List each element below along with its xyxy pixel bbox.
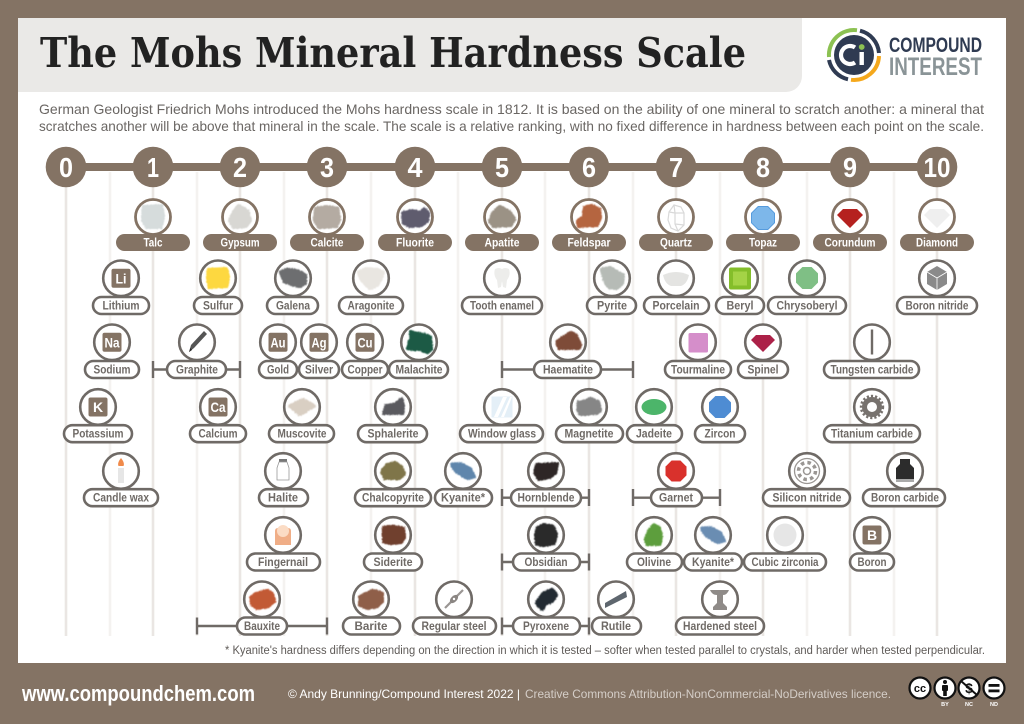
mineral: Pyroxene: Pyroxene [523, 621, 569, 633]
mineral: Tungsten carbide: Tungsten carbide [830, 364, 914, 376]
mineral: Diamond [900, 200, 974, 251]
mineral: Candle wax [84, 453, 158, 506]
mineral: Lithium: Li [116, 270, 126, 286]
mineral: Corundum [813, 200, 887, 251]
mineral: Gold: Gold [267, 364, 289, 376]
mineral: Pyrite: Pyrite [597, 300, 627, 312]
mineral: Titanium carbide [824, 389, 920, 442]
mineral: Titanium carbide: Titanium carbide [831, 429, 913, 441]
mineral: Graphite [153, 324, 240, 378]
mineral: Tourmaline [665, 324, 731, 378]
mineral: Sodium: Na [104, 334, 120, 350]
whole-step guide lines [66, 172, 937, 636]
mineral: Siderite: Siderite [374, 557, 412, 569]
mineral: Galena: Galena [276, 300, 311, 312]
scale axis 0 to 10: 6 [582, 152, 596, 183]
mineral: Boron: Boron [858, 557, 886, 569]
licence icons: BY [941, 702, 949, 708]
scale axis 0 to 10: 5 [495, 152, 509, 183]
mineral: Lithium [93, 260, 149, 314]
mineral: Silicon nitride: Silicon nitride [772, 493, 842, 505]
footer credit: © Andy Brunning/Compound Interest 2022 | [288, 687, 520, 701]
half-step guide lines [110, 172, 894, 636]
mineral: Potassium: K [93, 399, 103, 415]
mineral: Topaz [726, 200, 800, 251]
mineral: Boron [850, 517, 894, 570]
mineral: Jadeite: Jadeite [636, 429, 672, 441]
mineral: Kyanite (softer orientation) [435, 453, 492, 506]
mineral: Copper: Cu [358, 334, 372, 350]
scale axis 0 to 10: 2 [233, 152, 247, 183]
mineral: Tooth enamel [462, 260, 542, 314]
mineral: Porcelain: Porcelain [652, 300, 700, 312]
mineral: Muscovite [269, 389, 334, 442]
mineral: Feldspar [552, 200, 626, 251]
scale axis 0 to 10: 9 [843, 152, 857, 183]
mineral: Lithium: Lithium [102, 300, 140, 312]
mineral: Cubic zirconia [744, 517, 826, 570]
mineral: Quartz [639, 200, 713, 251]
scale axis 0 to 10: 10 [924, 152, 950, 183]
scale axis 0 to 10: 0 [59, 152, 73, 183]
mineral: Chalcopyrite: Chalcopyrite [362, 493, 424, 505]
scale axis 0 to 10: 8 [756, 152, 770, 183]
mineral: Beryl [716, 260, 764, 314]
mineral: Zircon [695, 389, 745, 442]
mineral: Kyanite (harder orientation) [684, 517, 742, 570]
mineral: Garnet [633, 453, 720, 506]
mineral: Obsidian: Obsidian [524, 557, 568, 569]
intro text [39, 101, 984, 134]
mineral: Gold: Au [270, 334, 286, 350]
mineral: Silicon nitride [763, 453, 850, 506]
licence icons: $ [965, 680, 973, 696]
logo: Compound Interest: COMPOUND [889, 34, 982, 57]
licence icons [910, 678, 1004, 708]
mineral: Fingernail: Fingernail [258, 557, 308, 569]
title banner [18, 18, 802, 92]
mineral: Quartz: Quartz [660, 238, 692, 250]
mineral: Kyanite (harder orientation): Kyanite* [692, 557, 734, 569]
mineral: Tourmaline: Tourmaline [671, 364, 725, 376]
mineral: Boron nitride [897, 260, 977, 314]
mineral: Spinel [738, 324, 788, 378]
mineral: Hornblende: Hornblende [518, 493, 574, 505]
mineral: Pyroxene [502, 582, 589, 634]
mineral: Malachite [389, 324, 448, 378]
mineral: Galena [267, 260, 318, 314]
mineral: Fingernail [247, 517, 320, 570]
mineral: Sphalerite: Sphalerite [368, 429, 418, 441]
mineral: Tooth enamel: Tooth enamel [470, 300, 534, 312]
mineral: Gypsum [203, 200, 277, 251]
intro text: German Geologist Friedrich Mohs introduced the Mohs hardness scale in 1812. It is based on the ability of one mineral to scratch another: a mineral that [39, 101, 984, 117]
mineral: Barite: Barite [354, 621, 388, 633]
scale axis 0 to 10: 1 [147, 152, 159, 183]
mineral: Boron nitride: Boron nitride [906, 300, 968, 312]
mineral: Beryl: Beryl [726, 300, 754, 312]
mineral: Sodium: Sodium [94, 364, 130, 376]
mineral: Talc: Talc [144, 238, 163, 250]
footer licence: Creative Commons Attribution-NonCommercial-NoDerivatives licence. [525, 687, 891, 701]
mineral: Garnet: Garnet [659, 493, 693, 505]
mineral: Spinel: Spinel [748, 364, 778, 376]
mineral: Calcite [290, 200, 364, 251]
mineral: Halite [259, 453, 308, 506]
mineral: Silver: Ag [312, 334, 326, 350]
mineral: Magnetite: Magnetite [564, 429, 614, 441]
mineral: Topaz: Topaz [749, 238, 777, 250]
mineral: Regular steel [413, 582, 496, 634]
licence icons: NC [965, 702, 973, 708]
mineral: Potassium [64, 389, 132, 442]
mineral: Aragonite: Aragonite [348, 300, 394, 312]
mineral: Candle wax: Candle wax [93, 493, 150, 505]
mineral: Copper [342, 324, 388, 378]
mineral: Aragonite [339, 260, 403, 314]
mineral: Apatite: Apatite [484, 238, 520, 250]
mineral: Chrysoberyl: Chrysoberyl [776, 300, 838, 312]
mineral: Sphalerite [358, 389, 427, 442]
mineral: Pyrite [587, 260, 636, 314]
mineral: Malachite: Malachite [396, 364, 442, 376]
licence icons: ND [990, 702, 998, 708]
mineral: Chrysoberyl [768, 260, 846, 314]
mineral: Jadeite [627, 389, 682, 442]
mineral: Obsidian [502, 517, 589, 570]
mineral: Calcium: Ca [210, 399, 226, 415]
mineral: Regular steel: Regular steel [422, 621, 486, 633]
scale axis 0 to 10: 3 [320, 152, 334, 183]
mineral: Bauxite [197, 582, 327, 634]
mineral: Graphite: Graphite [176, 364, 218, 376]
mineral: Hornblende [502, 453, 589, 506]
mineral: Kyanite (softer orientation): Kyanite* [441, 493, 485, 505]
mineral: Silver: Silver [305, 364, 333, 376]
mineral: Calcium [190, 389, 246, 442]
mineral: Gypsum: Gypsum [220, 238, 260, 250]
mineral: Cubic zirconia: Cubic zirconia [752, 557, 819, 569]
mineral: Barite [343, 582, 400, 634]
title: The Mohs Mineral Hardness Scale [40, 29, 746, 77]
mineral: Sodium [85, 324, 139, 378]
licence icons: cc [914, 683, 926, 695]
intro text: scratches another will be above that mineral in the scale. The scale is a relative ranking, with no fixed difference in hardness between each point on the scale. [39, 118, 984, 134]
mineral: Fluorite: Fluorite [396, 238, 434, 250]
mineral: Magnetite [556, 389, 623, 442]
mineral: Apatite [465, 200, 539, 251]
footnote: * Kyanite's hardness differs depending on the direction in which it is tested – softer when tested parallel to crystals, and harder when tested perpendicular. [225, 645, 985, 657]
mineral: Corundum: Corundum [824, 238, 876, 250]
mineral: Zircon: Zircon [704, 429, 736, 441]
scale axis 0 to 10: 7 [669, 152, 683, 183]
logo: Compound Interest: INTEREST [889, 53, 982, 81]
mineral: Feldspar: Feldspar [568, 238, 611, 250]
mineral: Olivine: Olivine [637, 557, 671, 569]
mineral: Window glass [460, 389, 543, 442]
mineral: Olivine [627, 517, 682, 570]
mineral: Sulfur: Sulfur [203, 300, 233, 312]
mineral: Window glass: Window glass [468, 429, 536, 441]
mineral: Rutile: Rutile [601, 621, 631, 633]
mineral: Fluorite [378, 200, 452, 251]
mineral: Talc [116, 200, 190, 251]
mineral: Porcelain [644, 260, 709, 314]
mineral: Potassium: Potassium [72, 429, 124, 441]
scale axis 0 to 10: 4 [408, 152, 423, 183]
scale axis 0 to 10 [46, 147, 957, 187]
mineral: Boron: B [867, 527, 877, 543]
mineral: Sulfur [194, 260, 242, 314]
mineral: Diamond: Diamond [916, 238, 958, 250]
mineral: Muscovite: Muscovite [278, 429, 326, 441]
mineral: Copper: Copper [348, 364, 383, 376]
mineral: Rutile [592, 582, 641, 634]
mineral: Siderite [364, 517, 422, 570]
mineral: Boron carbide: Boron carbide [871, 493, 939, 505]
mineral: Hardened steel [676, 582, 764, 634]
mineral: Haematite [502, 324, 633, 378]
mineral: Boron carbide [863, 453, 945, 506]
mineral: Halite: Halite [268, 493, 298, 505]
mineral: Hardened steel: Hardened steel [683, 621, 757, 633]
mineral: Tungsten carbide [824, 324, 919, 378]
mineral: Calcite: Calcite [310, 238, 344, 250]
mineral: Bauxite: Bauxite [244, 621, 280, 633]
footer website: www.compoundchem.com [21, 681, 255, 706]
mineral: Silver [299, 324, 339, 378]
mineral: Haematite: Haematite [543, 364, 593, 376]
mineral: Gold [259, 324, 297, 378]
mineral: Chalcopyrite [355, 453, 431, 506]
mineral: Calcium: Calcium [198, 429, 238, 441]
logo: Compound Interest [829, 30, 982, 81]
